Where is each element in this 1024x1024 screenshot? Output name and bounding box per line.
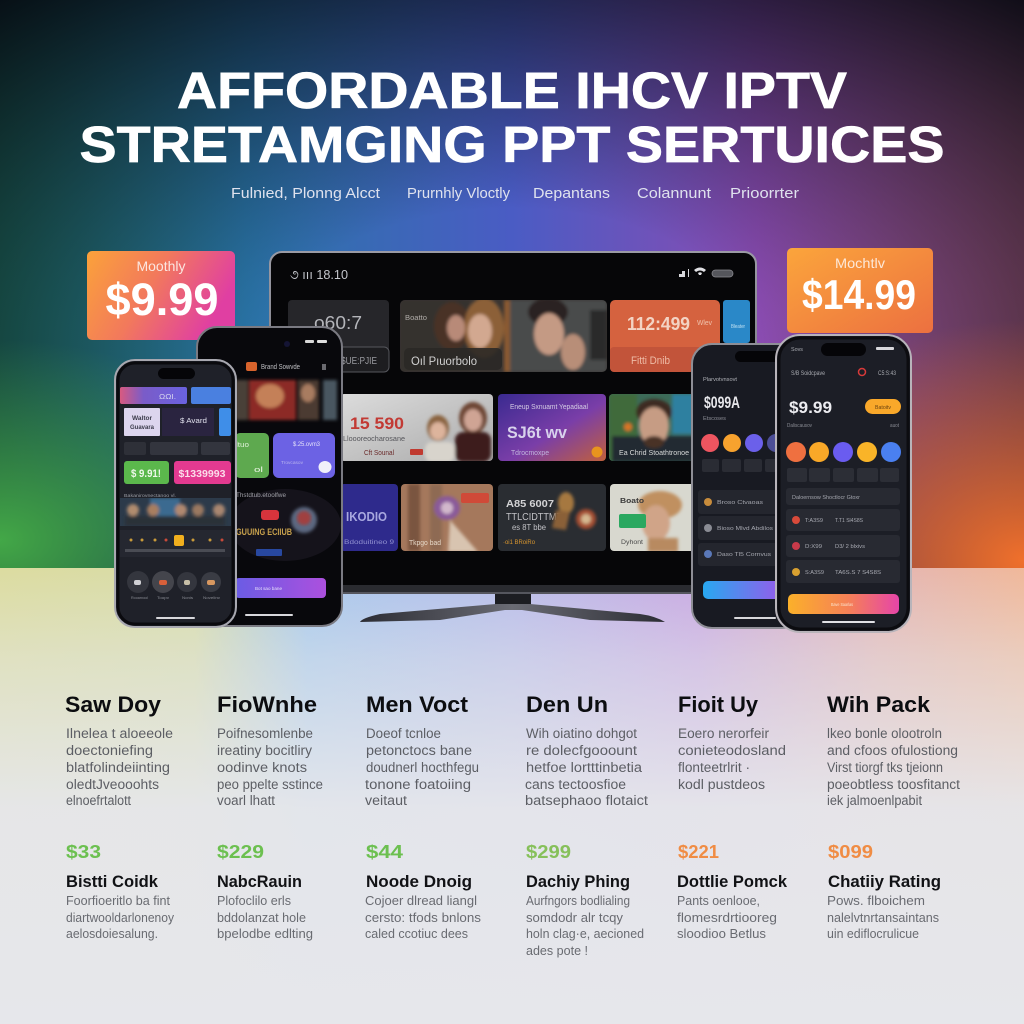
tv status bar: ૭ ııı 18.10 xyxy=(290,267,348,282)
price tag: monthly 14.99: $14.99 xyxy=(802,271,916,318)
feature column 5: kodl pustdeos xyxy=(678,777,765,792)
feature column 2: $229 xyxy=(217,842,264,862)
price tag: monthly 14.99: Mochtlv xyxy=(835,255,885,271)
chips xyxy=(787,468,899,482)
list rows: Daso Tl5 Cornvus xyxy=(717,552,771,558)
tv card: blue xyxy=(723,300,750,343)
dark banner xyxy=(229,489,341,561)
feature column 1: elnoefrtalott xyxy=(66,793,131,808)
home bar xyxy=(156,617,195,619)
feature column 3: caled ccotiuc dees xyxy=(365,926,468,941)
button: Bave Saarlas xyxy=(831,602,854,607)
tv card: dark offer xyxy=(498,484,606,551)
button xyxy=(703,581,785,599)
television xyxy=(270,252,756,622)
dark banner: GUUING ECIIUB xyxy=(236,527,292,537)
tv card: blue: Bleater xyxy=(731,324,745,330)
feature column 6: poeobtless toosfitanct xyxy=(827,777,960,792)
background: pale gradient lower xyxy=(0,568,1024,1024)
pill button xyxy=(865,399,901,414)
feature column 3: $44 xyxy=(366,842,403,862)
cast strip xyxy=(120,498,231,526)
feature column 1: $33 xyxy=(66,842,101,862)
feature column 6: and cfoos ofulostiong xyxy=(827,743,958,758)
title: AFFORDABLE IHCV IPTV xyxy=(177,62,847,119)
feature column 1 xyxy=(65,692,174,941)
tv card: purple offer: Tdrocmoxpe xyxy=(511,448,549,457)
feature column 6: Wih Pack xyxy=(827,692,931,717)
color dots xyxy=(701,434,785,452)
header text: Plarvotvnsovt xyxy=(703,377,737,383)
list rows: Broso Ctvaoas xyxy=(717,500,763,506)
feature column 2: FioWnhe xyxy=(217,692,317,717)
caption: Etscoses xyxy=(703,416,727,422)
feature column 2: ireatiny bocitliry xyxy=(217,743,312,758)
navigation labels xyxy=(231,186,799,202)
feature column 6: lkeo bonle olootroln xyxy=(827,726,942,741)
tv card: clock: o60:7 xyxy=(314,313,362,333)
tv card: purple offer xyxy=(498,394,606,461)
green card: ltuo xyxy=(236,442,249,449)
feature column 4: somdodr alr tcqy xyxy=(526,910,624,925)
feature column 2 xyxy=(217,692,323,941)
feature column 2: bpelodbe edlting xyxy=(217,926,313,941)
list rows: Bioso Mlvd Abdilos xyxy=(717,526,773,532)
tv card: drama photo xyxy=(400,298,607,372)
tv card: orange price: Fitti Dnib xyxy=(631,355,670,367)
list rows: D:X99 xyxy=(805,544,822,550)
tv card: clock: $UE:PJIE xyxy=(341,356,377,367)
home bar xyxy=(245,614,293,616)
feature column 3 xyxy=(365,692,482,941)
infographic canvas xyxy=(66,72,960,958)
feature column 4: re dolecfgooount xyxy=(526,743,637,758)
feature column 1: aelosdoiesalung. xyxy=(66,926,158,941)
feature column 1: oledtJveooohts xyxy=(66,777,159,792)
tv card: orange price xyxy=(610,300,720,372)
icon strip xyxy=(120,530,231,557)
list rows: TA6S.S 7 S4S8S xyxy=(835,570,881,576)
tv card: man portrait xyxy=(609,394,691,461)
list rows xyxy=(698,490,782,566)
poster row xyxy=(235,380,337,420)
phone: back left xyxy=(197,327,342,626)
header: S/B Soidcpave xyxy=(791,370,825,377)
navigation labels: Fulnied, Plonng Alcct xyxy=(231,186,380,202)
app header: Brand Sowvde xyxy=(261,362,300,371)
feature column 3: doudnerl hocthfegu xyxy=(366,760,479,775)
feature column 1: Saw Doy xyxy=(65,692,162,717)
feature column 2: voarl lhatt xyxy=(217,793,275,808)
feature column 6: uin ediflocrulicue xyxy=(827,926,919,941)
header xyxy=(791,347,896,377)
title xyxy=(80,62,944,173)
feature column 5: Fioit Uy xyxy=(678,692,759,717)
feature column 3: Cojoer dlread liangl xyxy=(365,893,477,908)
feature column 1: blatfolindeiinting xyxy=(66,760,170,775)
phone: front right: auot xyxy=(890,423,900,429)
feature column 5: flomesrdrtiooreg xyxy=(677,910,777,925)
feature column 5: conieteodosland xyxy=(678,743,786,758)
feature column 2: Poifnesomlenbe xyxy=(217,726,313,741)
feature column 5: Pants oenlooe, xyxy=(677,893,760,908)
list rows: S:A3S9 xyxy=(805,570,824,576)
feature column 5: Eoero nerorfeir xyxy=(678,726,770,741)
chips xyxy=(124,442,230,455)
price tag: monthly 14.99 xyxy=(787,248,933,333)
notch xyxy=(821,343,866,356)
feature column 6: Pows. flboichem xyxy=(827,893,925,908)
list rows: T:A3S9 xyxy=(805,518,823,524)
feature column 3: veitaut xyxy=(365,793,407,808)
feature column 2: oodinve knots xyxy=(217,760,307,775)
title: STRETAMGING PPT SERTUICES xyxy=(80,116,944,173)
feature column 1: Foorfioeritlo ba fint xyxy=(66,893,170,908)
feature column 1: Bistti Coidk xyxy=(66,873,159,891)
feature column 6: nalelvtnrtansaintans xyxy=(827,910,939,925)
tv card: drama photo: Oıl Pıuorbolo xyxy=(411,356,477,368)
tv card: family offer: Cft Sounal xyxy=(364,450,394,457)
top buttons xyxy=(120,387,231,404)
phone: back right xyxy=(692,344,802,628)
status icons xyxy=(284,340,327,347)
navigation labels: Prurnhly Vloctly xyxy=(407,186,511,202)
tv card: rose photo: Tkpgo bad xyxy=(409,540,441,547)
feature column 3: cersto: tfods bnlons xyxy=(365,910,482,925)
round actions xyxy=(127,571,221,600)
feature column 2: NabcRauin xyxy=(217,873,302,891)
tv card: dark offer: es 8T bbe xyxy=(512,523,547,532)
price: $9.99 xyxy=(789,398,832,417)
phone: front left xyxy=(115,360,236,627)
feature column 5: $221 xyxy=(678,842,719,862)
feature column 4: Dachiy Phing xyxy=(526,873,630,891)
promo row: $ Avard xyxy=(180,418,207,425)
feature column 6: iek jalmoenlpabit xyxy=(827,793,922,808)
tv card: dark offer: TTLCIDTTMT xyxy=(506,512,562,523)
feature column 4: holn clag·e, aecioned xyxy=(526,926,644,941)
list rows xyxy=(786,488,900,583)
green card: ol xyxy=(254,467,264,474)
green price xyxy=(124,461,169,484)
tv status bar xyxy=(290,267,733,282)
list rows: T.T1 Sl4S8S xyxy=(835,518,863,524)
tv card: pale portrait xyxy=(610,484,691,551)
feature column 4: batsephaoo flotaict xyxy=(525,793,648,808)
feature column 6: Chatiiy Rating xyxy=(828,873,941,891)
tv card: man portrait: Ea Chrid Stoathtronoe xyxy=(619,450,689,457)
tv card: clock xyxy=(288,300,389,372)
caption: Bakanirovnectanoo vl. xyxy=(124,493,176,498)
feature column 6 xyxy=(827,692,960,941)
button xyxy=(788,594,899,614)
navigation labels: Colannunt xyxy=(637,186,711,202)
caption: Daliscausov xyxy=(787,423,812,429)
price tag: monthly 9.99: Moothly xyxy=(136,258,186,274)
top buttons: ΩΩI. xyxy=(159,394,176,401)
feature column 6: $099 xyxy=(828,842,873,862)
home bar xyxy=(822,621,875,623)
tv card: indigo: Bdoduitineo 9 xyxy=(344,539,394,546)
purple card xyxy=(273,433,335,478)
feature column 4 xyxy=(525,692,648,958)
notch xyxy=(158,368,195,379)
promo row: Guavara xyxy=(130,425,155,431)
feature column 1: doectoniefing xyxy=(66,743,153,758)
purple card: Trovcasov xyxy=(281,460,304,465)
app header xyxy=(246,362,326,371)
price tag: monthly 9.99: $9.99 xyxy=(106,274,218,325)
tv card: family offer: 15 590 xyxy=(350,414,404,433)
pink price xyxy=(174,461,231,484)
tv card: pale portrait: Boato xyxy=(620,496,644,505)
feature column 4: Aurfngors bodlialing xyxy=(526,893,630,908)
header: Sovs xyxy=(791,347,804,353)
feature column 3: Doeof tcnloe xyxy=(366,726,441,741)
tv card: dark offer: A85 6007 xyxy=(506,499,554,510)
round actions: Novelinv xyxy=(203,595,220,600)
green price: $ 9.91! xyxy=(131,468,161,480)
tv card: purple offer: SJ6t wv xyxy=(507,423,568,442)
navigation labels: Depantans xyxy=(533,186,610,202)
feature column 1: diartwooldarlonenoy xyxy=(66,910,174,925)
green card xyxy=(235,433,269,478)
feature column 3: Men Voct xyxy=(366,692,469,717)
pink price: $1339993 xyxy=(178,468,226,480)
purple button: Bot sao bane xyxy=(255,586,282,591)
tv card: orange price: Wlev xyxy=(697,320,712,327)
round actions: Rooarnool xyxy=(131,595,148,600)
tv card: indigo xyxy=(340,484,398,551)
phone: front right xyxy=(776,335,911,632)
home bar xyxy=(734,617,776,619)
tv card: drama photo: Boatto xyxy=(405,315,427,322)
promo row: Waltor xyxy=(132,416,153,422)
tv card: rose photo xyxy=(401,484,493,552)
feature column 4: hetfoe lortttinbetia xyxy=(526,760,643,775)
feature column 6: Virst tiorgf tks tjeionn xyxy=(827,760,943,775)
feature column 2: Plofoclilo erls xyxy=(217,893,291,908)
list rows: D3/ 2 blxivs xyxy=(835,544,865,550)
feature column 3: Noode Dnoig xyxy=(366,873,472,891)
feature column 4: $299 xyxy=(526,842,571,862)
feature column 2: peo ppelte sstince xyxy=(217,777,323,792)
feature column 5: sloodioo Betlus xyxy=(677,926,767,941)
chips xyxy=(702,459,777,472)
background: dark gradient upper xyxy=(0,0,1024,568)
color dots xyxy=(786,442,901,462)
feature column 3: petonctocs bane xyxy=(366,743,472,758)
pill button: Batoitv xyxy=(875,405,891,411)
feature column 4: Wih oiatino dohgot xyxy=(526,726,637,741)
tv card: pale portrait: Dyhont xyxy=(621,539,643,546)
tv card: purple offer: Eneup Sxnuamt Yepadiaal xyxy=(510,404,588,411)
promo row xyxy=(124,408,231,436)
header: C5:S:43 xyxy=(878,370,896,377)
tv bezel xyxy=(270,252,756,593)
feature column 5 xyxy=(677,692,788,941)
feature column 4: Den Un xyxy=(526,692,608,717)
purple card: $.25.ovm3 xyxy=(293,442,321,448)
notch xyxy=(735,351,785,362)
tv card: indigo: IKODIO xyxy=(346,509,387,524)
price: $099A xyxy=(704,393,740,412)
feature column 5: flonteetrlrit · xyxy=(678,760,750,775)
tv card: dark offer: ·oi1 BRoiRo xyxy=(503,539,535,546)
feature column 3: tonone foatoiing xyxy=(365,777,471,792)
price tag: monthly 9.99 xyxy=(87,251,235,340)
feature column 2: bddolanzat hole xyxy=(217,910,306,925)
tv card: family offer: Lloooreocharosane xyxy=(343,436,405,443)
round actions: Toopv xyxy=(157,595,169,600)
tv card: orange price: 112:499 xyxy=(627,314,690,334)
list rows: Daloernsow Shoctlocr Gtoxr xyxy=(792,495,860,501)
round actions: Nonis xyxy=(182,595,193,600)
purple button xyxy=(235,578,326,598)
feature column 4: ades pote ! xyxy=(526,943,588,958)
feature column 1: Ilnelea t aloeeole xyxy=(66,726,173,741)
tv card: family offer xyxy=(340,394,493,462)
feature column 4: cans tectoosfioe xyxy=(525,777,626,792)
feature column 5: Dottlie Pomck xyxy=(677,873,788,891)
dark banner: Thstdtub.etoolfwe xyxy=(236,492,286,499)
navigation labels: Prioorrter xyxy=(730,186,799,202)
tv stand xyxy=(360,592,665,622)
